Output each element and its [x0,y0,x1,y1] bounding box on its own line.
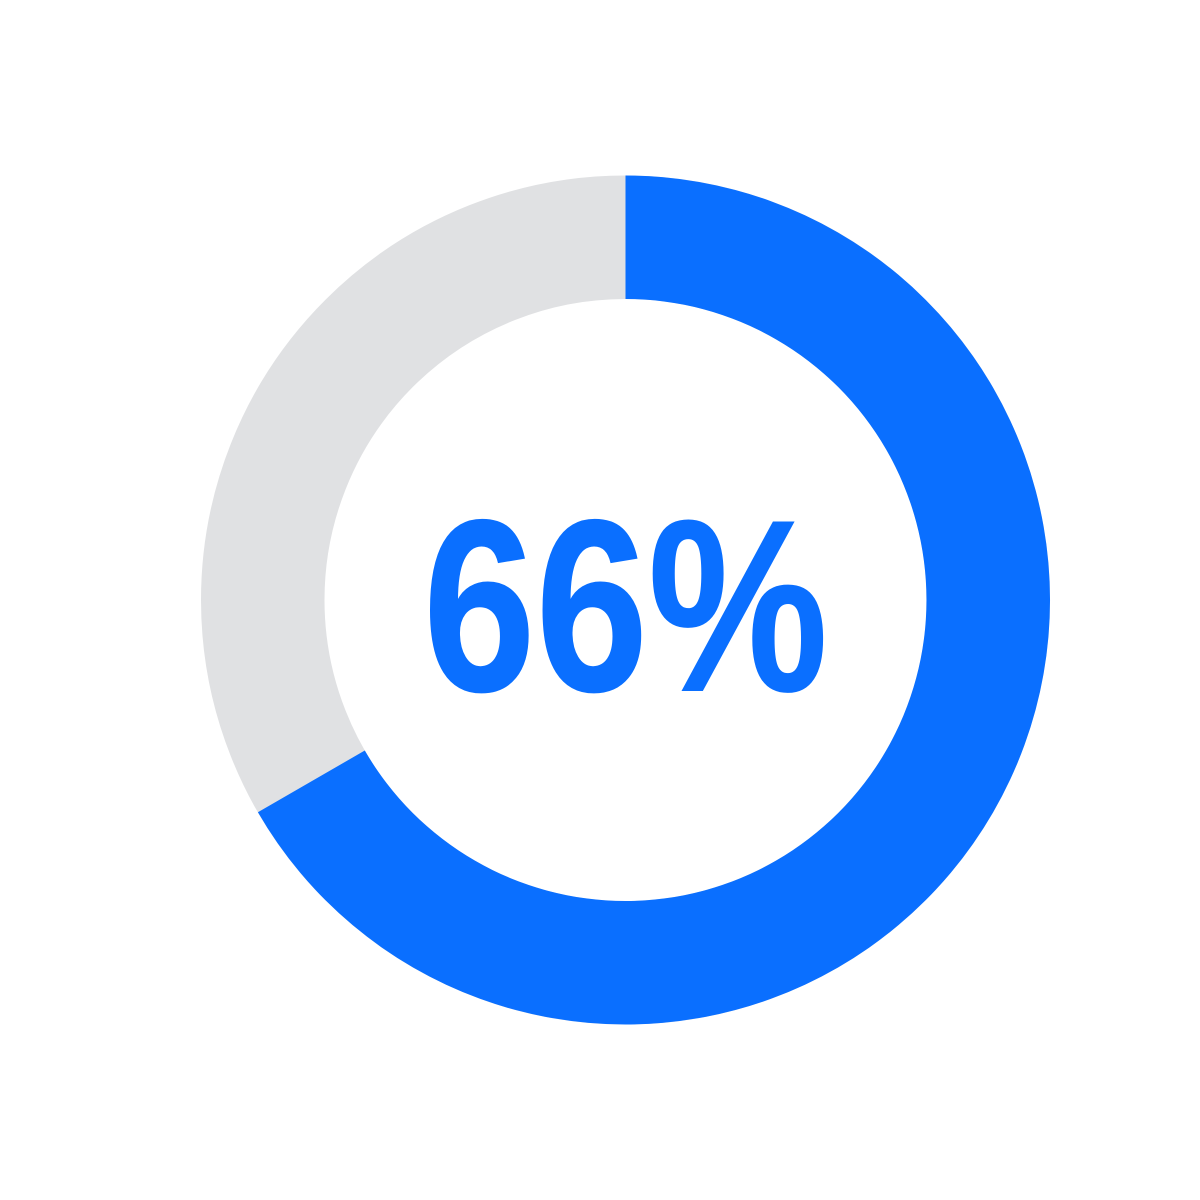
donut track: remaining share [263,237,988,963]
donut segment: 66% [258,176,1050,1024]
percentage label: 66% [423,468,828,742]
